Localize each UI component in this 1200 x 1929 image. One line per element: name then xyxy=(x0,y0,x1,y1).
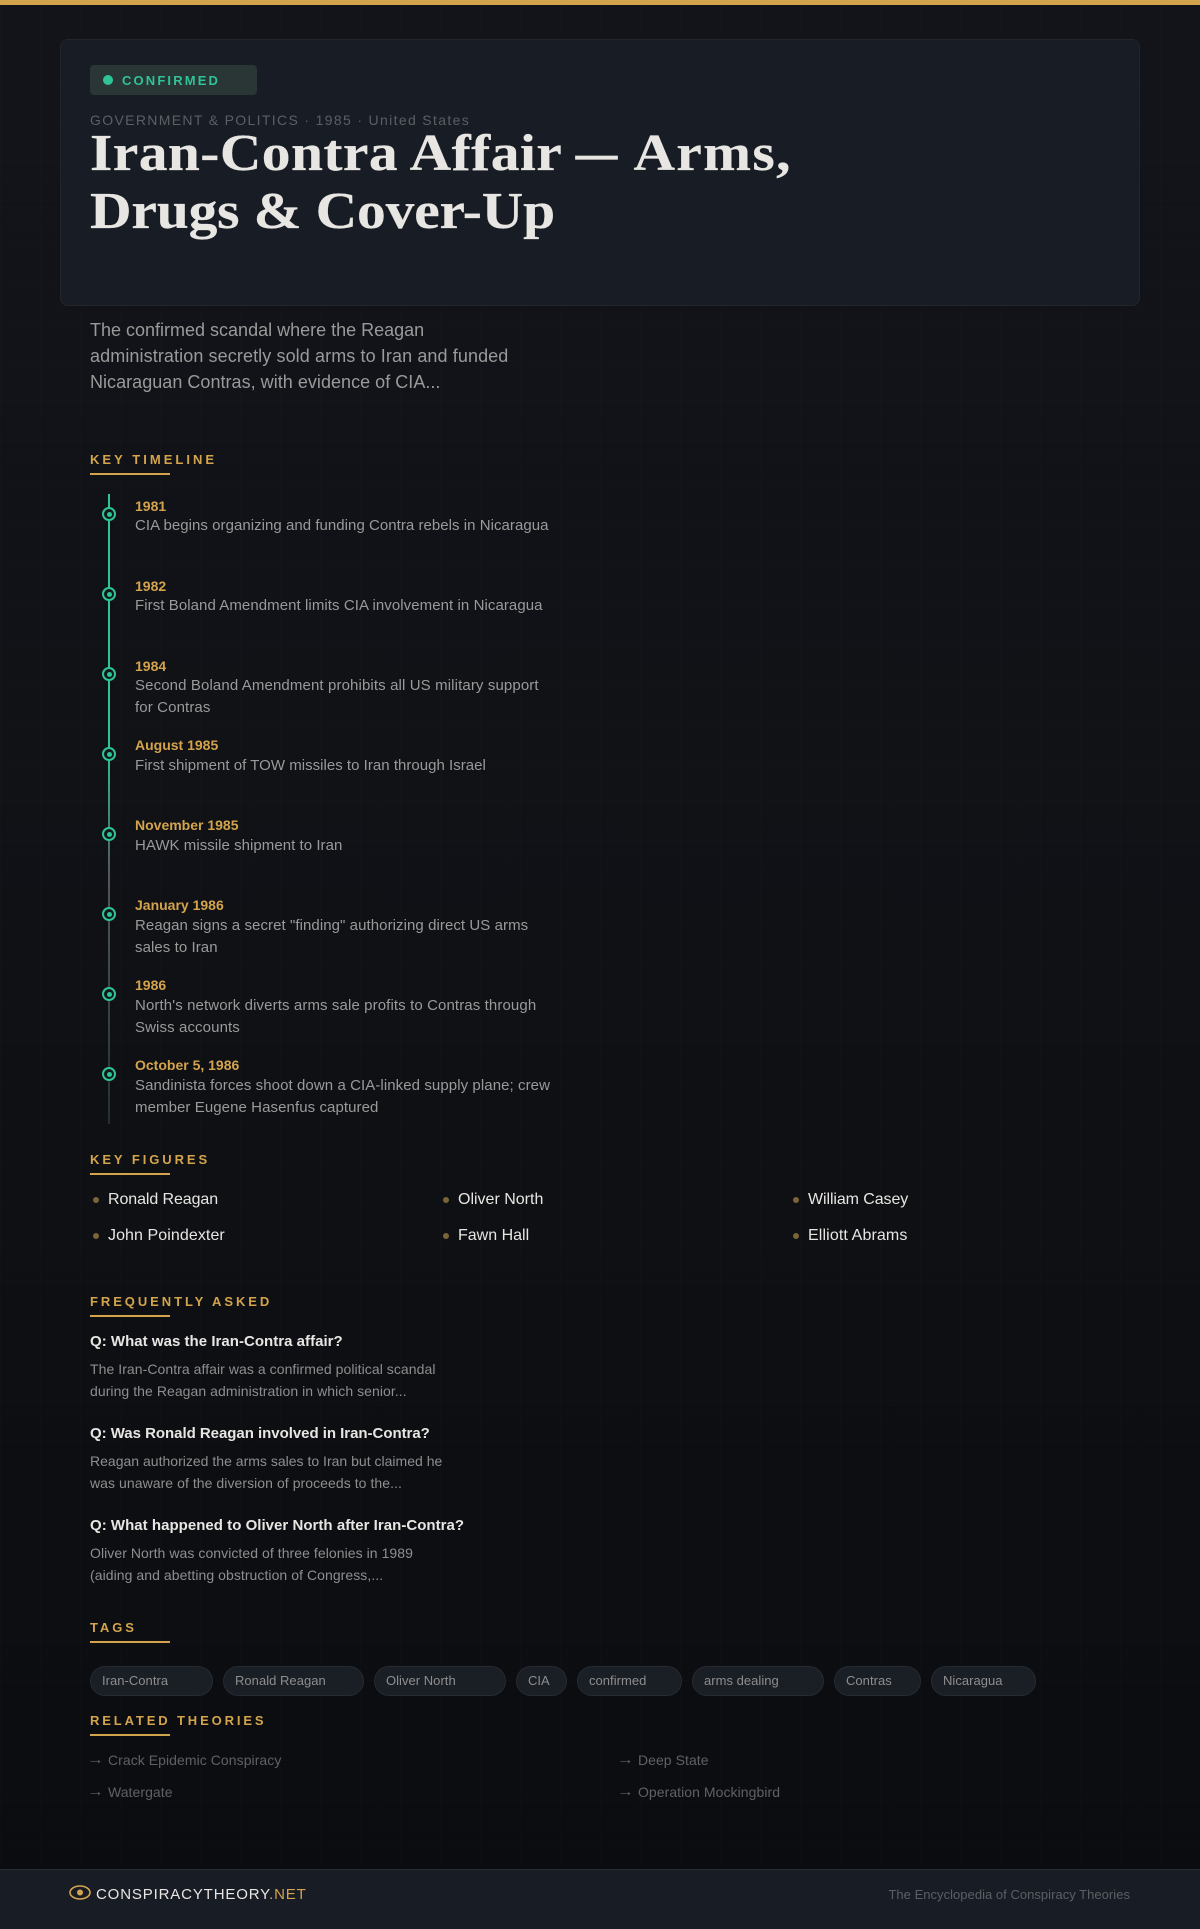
tag xyxy=(516,1666,567,1696)
tag xyxy=(223,1666,364,1696)
question 2: Q: Was Ronald Reagan involved in Iran-Contra? xyxy=(90,1425,430,1442)
event November 1985 xyxy=(135,817,342,854)
heading: key timeline: KEY TIMELINE xyxy=(90,452,217,467)
tag: Oliver North xyxy=(386,1673,456,1688)
event 1986 xyxy=(135,977,536,1036)
timeline xyxy=(108,494,110,1124)
tag xyxy=(90,1666,213,1696)
event 1984: 1984 xyxy=(135,658,166,674)
event 1984 xyxy=(135,658,539,716)
event 1984: Second Boland Amendment prohibits all US military support xyxy=(135,677,539,694)
tag: CIA xyxy=(528,1673,550,1688)
event November 1985: November 1985 xyxy=(135,817,239,833)
timeline node 1986 xyxy=(102,987,116,1001)
event October 5, 1986 xyxy=(135,1057,550,1116)
title: — xyxy=(576,125,618,182)
event October 5, 1986: October 5, 1986 xyxy=(135,1057,239,1073)
event October 5, 1986: member Eugene Hasenfus captured xyxy=(135,1099,378,1116)
related link: Deep State: → xyxy=(617,1751,634,1767)
heading: frequently asked: FREQUENTLY ASKED xyxy=(90,1294,272,1309)
answer 3 xyxy=(90,1545,413,1583)
tag list xyxy=(90,1666,1036,1696)
title: Drugs & Cover-Up xyxy=(90,183,555,240)
event January 1986: January 1986 xyxy=(135,897,224,913)
answer 1: during the Reagan administration in which senior... xyxy=(90,1383,407,1399)
figure: William Casey: William Casey xyxy=(808,1191,908,1208)
timeline node January 1986 xyxy=(102,907,116,921)
event August 1985: First shipment of TOW missiles to Iran through Israel xyxy=(135,757,486,774)
event January 1986: Reagan signs a secret "finding" authorizing direct US arms xyxy=(135,917,528,934)
category and date meta line: GOVERNMENT & POLITICS · 1985 · United States xyxy=(90,112,470,128)
heading: tags: TAGS xyxy=(90,1620,137,1635)
timeline node August 1985 xyxy=(102,747,116,761)
event 1986: North's network diverts arms sale profits to Contras through xyxy=(135,997,536,1014)
event January 1986 xyxy=(135,897,528,956)
event August 1985 xyxy=(135,737,486,774)
question 1: Q: What was the Iran-Contra affair? xyxy=(90,1333,343,1350)
timeline node October 5, 1986 xyxy=(102,1067,116,1081)
logo wordmark: CONSPIRACYTHEORY.NET xyxy=(96,1886,307,1903)
footer tagline: The Encyclopedia of Conspiracy Theories xyxy=(888,1887,1130,1902)
heading: related theories: RELATED THEORIES xyxy=(90,1713,266,1728)
figure: Ronald Reagan: Ronald Reagan xyxy=(108,1191,218,1208)
question 3: Q: What happened to Oliver North after Iran-Contra? xyxy=(90,1517,464,1534)
timeline node November 1985 xyxy=(102,827,116,841)
tag: Contras xyxy=(846,1673,892,1688)
figure: John Poindexter: John Poindexter xyxy=(108,1227,225,1244)
answer 3: (aiding and abetting obstruction of Congress,... xyxy=(90,1567,383,1583)
timeline node 1981 xyxy=(102,507,116,521)
title: Iran-Contra Affair Arms, xyxy=(90,125,792,182)
event 1982: 1982 xyxy=(135,578,166,594)
tag xyxy=(577,1666,682,1696)
related link: Watergate: Watergate xyxy=(108,1784,173,1800)
event January 1986: sales to Iran xyxy=(135,939,218,956)
answer 1 xyxy=(90,1361,436,1399)
related link: Watergate: → xyxy=(87,1783,104,1799)
footer bar xyxy=(0,1869,1200,1929)
status badge: confirmed xyxy=(90,65,257,95)
figure: Elliott Abrams: Elliott Abrams xyxy=(808,1227,908,1244)
badge label: CONFIRMED xyxy=(122,73,220,88)
event October 5, 1986: Sandinista forces shoot down a CIA-linked supply plane; crew xyxy=(135,1077,550,1094)
top accent bar xyxy=(0,0,1200,5)
event 1986: 1986 xyxy=(135,977,166,993)
figure: Fawn Hall: Fawn Hall xyxy=(458,1227,529,1244)
event 1982 xyxy=(135,578,543,614)
tag: Iran-Contra xyxy=(102,1673,168,1688)
tag: confirmed xyxy=(589,1673,646,1688)
timeline node 1982 xyxy=(102,587,116,601)
related link: Operation Mockingbird: Operation Mockingbird xyxy=(638,1784,780,1800)
event November 1985: HAWK missile shipment to Iran xyxy=(135,837,342,854)
panel: hero header card xyxy=(60,39,1140,306)
summary text xyxy=(90,320,508,392)
answer 1: The Iran-Contra affair was a confirmed political scandal xyxy=(90,1361,436,1377)
icon: eye logo xyxy=(69,1885,91,1900)
answer 2: was unaware of the diversion of proceeds to the... xyxy=(90,1475,402,1491)
timeline node 1984 xyxy=(102,667,116,681)
tag xyxy=(834,1666,921,1696)
related link: Crack Epidemic Conspiracy: → xyxy=(87,1751,104,1767)
event 1981: CIA begins organizing and funding Contra rebels in Nicaragua xyxy=(135,517,548,534)
tag xyxy=(374,1666,506,1696)
event 1981 xyxy=(135,498,548,534)
badge dot xyxy=(103,75,113,85)
figure: Oliver North: Oliver North xyxy=(458,1191,543,1208)
summary text: Nicaraguan Contras, with evidence of CIA... xyxy=(90,372,440,392)
event August 1985: August 1985 xyxy=(135,737,218,753)
event 1982: First Boland Amendment limits CIA involvement in Nicaragua xyxy=(135,597,543,614)
summary text: The confirmed scandal where the Reagan xyxy=(90,320,424,340)
related link: Crack Epidemic Conspiracy: Crack Epidemic Conspiracy xyxy=(108,1752,281,1768)
tag: arms dealing xyxy=(704,1673,779,1688)
answer 3: Oliver North was convicted of three felonies in 1989 xyxy=(90,1545,413,1561)
answer 2: Reagan authorized the arms sales to Iran but claimed he xyxy=(90,1453,442,1469)
event 1984: for Contras xyxy=(135,699,211,716)
event 1986: Swiss accounts xyxy=(135,1019,240,1036)
tag xyxy=(692,1666,824,1696)
tag: Nicaragua xyxy=(943,1673,1003,1688)
event 1981: 1981 xyxy=(135,498,166,514)
related link: Deep State: Deep State xyxy=(638,1752,709,1768)
tag: Ronald Reagan xyxy=(235,1673,326,1688)
heading: key figures: KEY FIGURES xyxy=(90,1152,210,1167)
answer 2 xyxy=(90,1453,442,1491)
related link: Operation Mockingbird: → xyxy=(617,1783,634,1799)
summary text: administration secretly sold arms to Iran and funded xyxy=(90,346,508,366)
tag xyxy=(931,1666,1036,1696)
title xyxy=(90,125,792,240)
